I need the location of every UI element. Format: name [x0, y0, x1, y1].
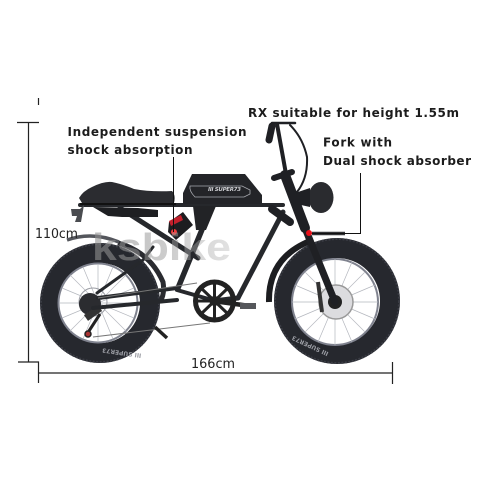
front fender [269, 241, 310, 302]
battery: III SUPER73 [208, 187, 241, 193]
height dimension [17, 98, 39, 383]
callout: fork: Fork with [323, 136, 392, 150]
callout: fork [306, 136, 471, 236]
callout: rear suspension: Independent suspension [68, 125, 246, 139]
callout: rider height: RX suitable for height 1.55m [248, 106, 459, 120]
headlight [292, 182, 334, 213]
length label: 166cm [191, 357, 235, 372]
battery [183, 174, 262, 204]
frame tubes [80, 205, 283, 308]
chain [93, 283, 210, 337]
rear rack and tail light [93, 207, 158, 217]
seat [79, 182, 175, 203]
rear wheel [41, 244, 159, 362]
handlebar [269, 123, 307, 192]
bike [41, 123, 399, 363]
rear shock [168, 212, 193, 240]
kickstand [155, 327, 167, 338]
front wheel [275, 239, 399, 363]
callout: fork: Dual shock absorber [323, 154, 471, 168]
front wheel: III SUPER73 [291, 334, 330, 357]
chainring [196, 282, 256, 320]
head tube and fork [272, 175, 335, 302]
callout: rear suspension: shock absorption [68, 143, 192, 157]
watermark: ksbike [92, 227, 231, 269]
rear fender [118, 243, 164, 302]
seat post block [193, 206, 216, 230]
tire text: III SUPER73 [102, 346, 142, 359]
height label: 110cm [35, 227, 78, 242]
length dimension [38, 362, 392, 384]
callout: rear suspension [68, 125, 246, 232]
